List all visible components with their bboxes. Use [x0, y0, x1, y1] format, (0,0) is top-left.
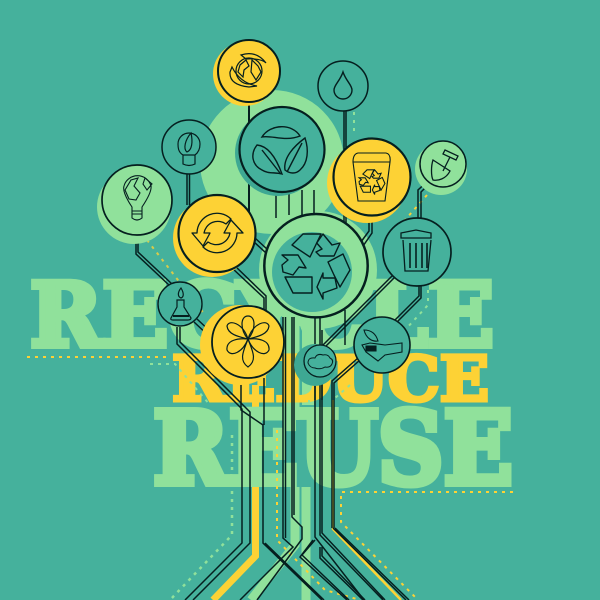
trace: trash to cloud — [323, 276, 394, 347]
node: arrows yellow — [173, 195, 256, 277]
node: bulb leaf — [162, 120, 216, 174]
trace: arrows to main — [253, 238, 268, 253]
icon: earth light bulb — [124, 176, 152, 220]
node: earth bulb — [97, 165, 172, 244]
trunk lower bands — [251, 400, 401, 600]
trunk fill bands — [272, 300, 308, 420]
icon: water drop — [334, 72, 352, 99]
trace: bin to main — [358, 215, 372, 249]
node: hand — [354, 317, 410, 373]
node: bin yellow — [327, 138, 410, 223]
trace: earth bulb to flask — [136, 234, 172, 286]
node: flask — [158, 282, 202, 326]
node: flower — [200, 305, 284, 385]
icon: flower petals — [227, 316, 269, 367]
icon: cloud — [308, 354, 333, 369]
yellow trunk band — [213, 385, 256, 600]
word: REDUCE: REDUCE — [172, 342, 489, 416]
icon: three leaves — [253, 127, 307, 174]
node: leaves — [235, 107, 324, 196]
icon: shovel — [432, 150, 458, 180]
trace: earth stem — [248, 102, 250, 215]
trace: trash to hand — [394, 286, 421, 323]
trace: leaves to main — [276, 190, 314, 218]
icon: leaf bulb — [178, 133, 200, 166]
icon: recycling bin — [353, 153, 390, 201]
node: earth — [213, 40, 280, 106]
icon: trash can — [401, 230, 431, 271]
node: shovel — [415, 141, 467, 195]
dotted guide lines — [27, 95, 513, 600]
background circle: large light green — [200, 90, 344, 234]
icon: flask with flame — [171, 288, 191, 320]
trace: water stem — [344, 111, 346, 225]
icon: hand with seed — [362, 330, 402, 361]
background circle: main light green — [259, 211, 377, 329]
trace: shovel to trash — [418, 180, 431, 219]
trace: bulb leaf stem — [187, 173, 190, 205]
word: REUSE: REUSE — [153, 390, 513, 508]
node: trash can — [383, 218, 451, 286]
trace: flask to trunk — [177, 327, 250, 600]
trace: flask to flower — [194, 319, 213, 337]
circuit traces — [136, 102, 431, 600]
node: water drop — [318, 61, 368, 111]
trace: hand to trunk — [332, 358, 360, 528]
trace: arrows lower — [232, 266, 266, 320]
icon: two circular arrows — [192, 213, 243, 253]
word: RECYCLE: RECYCLE — [30, 263, 494, 367]
trace: main to trunk — [240, 317, 293, 600]
icon: recycling arrows — [282, 234, 350, 299]
node: main recycle — [264, 214, 368, 317]
trace: flower stems — [241, 378, 324, 600]
icon: earth with arrows — [230, 54, 266, 87]
node: cloud — [294, 344, 336, 386]
